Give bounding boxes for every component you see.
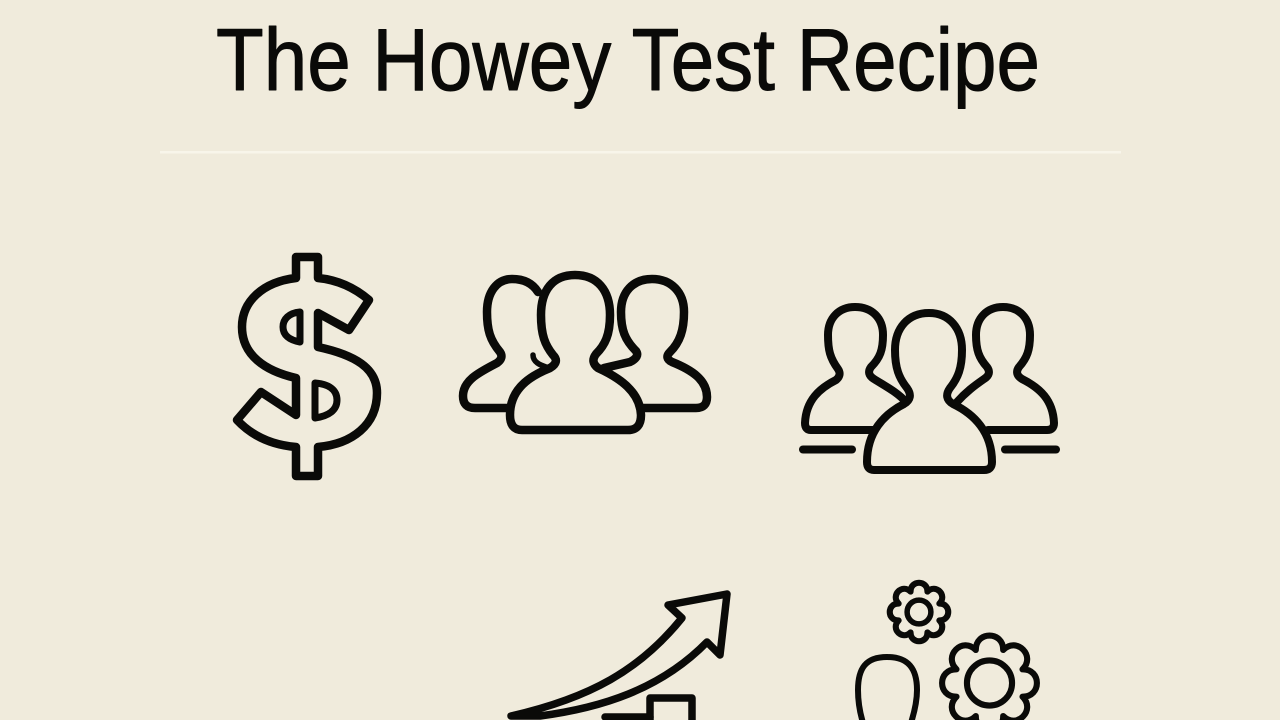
icon: small gear	[890, 583, 948, 641]
icon: large gear	[942, 636, 1037, 720]
icon: group of three investors	[463, 275, 707, 430]
icon: manager head	[858, 657, 917, 720]
icon: common enterprise group	[803, 307, 1056, 470]
icon: dollar sign	[237, 257, 377, 476]
icon: profit arrow with bars	[511, 594, 727, 720]
title: The Howey Test Recipe	[216, 10, 1040, 109]
